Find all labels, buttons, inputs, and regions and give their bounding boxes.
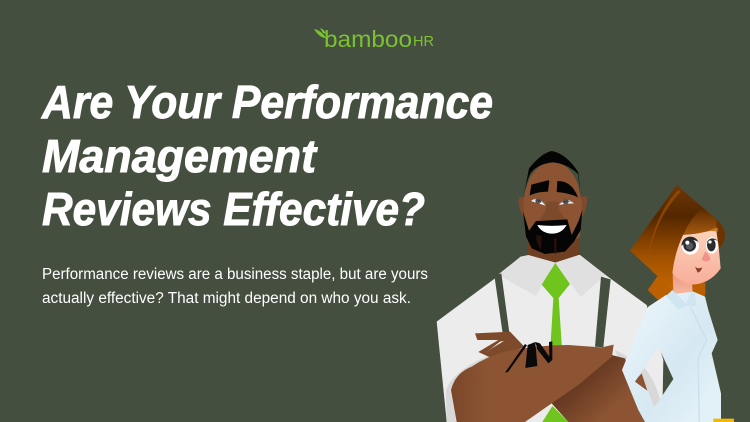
man eyebrows	[530, 180, 578, 197]
woman neck	[673, 273, 693, 305]
icon: bamboo leaf	[314, 28, 326, 38]
title	[41, 76, 493, 235]
title: Management	[42, 130, 318, 182]
intro text	[42, 266, 428, 307]
woman mouth	[695, 267, 702, 273]
man face	[523, 161, 582, 247]
woman hair	[630, 185, 725, 297]
woman right highlight	[708, 240, 712, 244]
intro text: Performance reviews are a business staple, but are yours	[42, 266, 428, 283]
man beard	[523, 210, 582, 254]
man neck	[528, 238, 579, 263]
man shirt band left	[446, 355, 493, 422]
logo wordmark: bamboo	[324, 26, 412, 52]
woman fringe	[683, 208, 717, 235]
man tie lower	[542, 406, 568, 422]
woman hair right lobe	[715, 219, 725, 249]
woman eyebrow	[708, 227, 718, 232]
man upper arm	[451, 345, 614, 422]
woman left iris	[683, 239, 696, 252]
man eyelids	[531, 200, 574, 206]
yellow folder	[713, 419, 734, 422]
man beard highlights	[536, 235, 557, 254]
man pupils	[535, 198, 569, 204]
intro text: actually effective? That might depend on who you ask.	[42, 290, 411, 307]
illustration: woman	[622, 185, 734, 422]
man arm visible through woman	[634, 373, 647, 391]
man finger slit	[485, 341, 504, 353]
man suspenders	[494, 273, 611, 347]
man hand behind	[475, 332, 525, 357]
woman right lash	[706, 238, 718, 243]
man fingers	[505, 341, 552, 373]
woman left pupil	[686, 242, 693, 250]
woman shirt	[622, 292, 721, 422]
woman nose	[702, 251, 710, 262]
title: Are Your Performance	[41, 76, 493, 128]
man hair	[523, 151, 581, 202]
woman right eye	[706, 237, 718, 254]
man smile	[537, 225, 567, 234]
man tie	[542, 263, 570, 348]
woman placket	[691, 307, 707, 422]
man eyes	[531, 199, 574, 206]
woman left lash	[682, 237, 698, 246]
man nose shadow	[539, 202, 566, 220]
woman back hair	[648, 275, 705, 299]
logo: BambooHR	[314, 26, 434, 52]
man shirt band right	[615, 350, 661, 407]
woman left eye	[682, 237, 699, 255]
woman collar	[666, 290, 697, 309]
woman eyes	[682, 237, 718, 255]
woman face	[672, 228, 721, 285]
woman hair streak	[647, 190, 681, 263]
man collar	[498, 255, 606, 297]
man shirt	[437, 255, 663, 422]
man ears	[518, 197, 587, 220]
woman left highlight	[685, 241, 689, 245]
illustration: man with crossed arms	[437, 151, 663, 422]
logo HR: HR	[413, 33, 434, 50]
title: Reviews Effective?	[42, 183, 425, 235]
woman right iris	[707, 239, 716, 251]
man lower arm	[552, 355, 647, 422]
